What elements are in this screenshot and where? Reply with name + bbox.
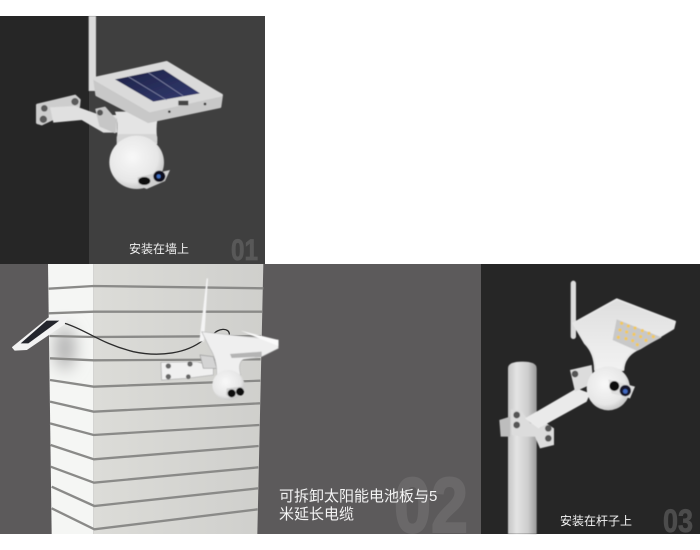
solar panel and cable [13,317,229,354]
camera on pole [499,281,675,534]
camera on slatted wall [161,278,278,400]
text: install on wall: 安装在墙上 [129,241,189,256]
number 03: 03 [663,503,693,539]
slatted wall [48,264,263,534]
panel: wall mount [0,16,265,267]
text: detachable solar panel caption: 米延长电缆 [279,506,354,523]
panel: pole mount [481,264,700,539]
text: install on pole: 安装在杆子上 [560,513,632,528]
number 01: 01 [231,234,258,267]
camera on wall [37,16,222,189]
text: detachable solar panel caption: 可拆卸太阳能电池板与5 [279,487,437,505]
number 02: 02 [394,461,468,549]
panel: detachable solar panel [0,264,481,549]
